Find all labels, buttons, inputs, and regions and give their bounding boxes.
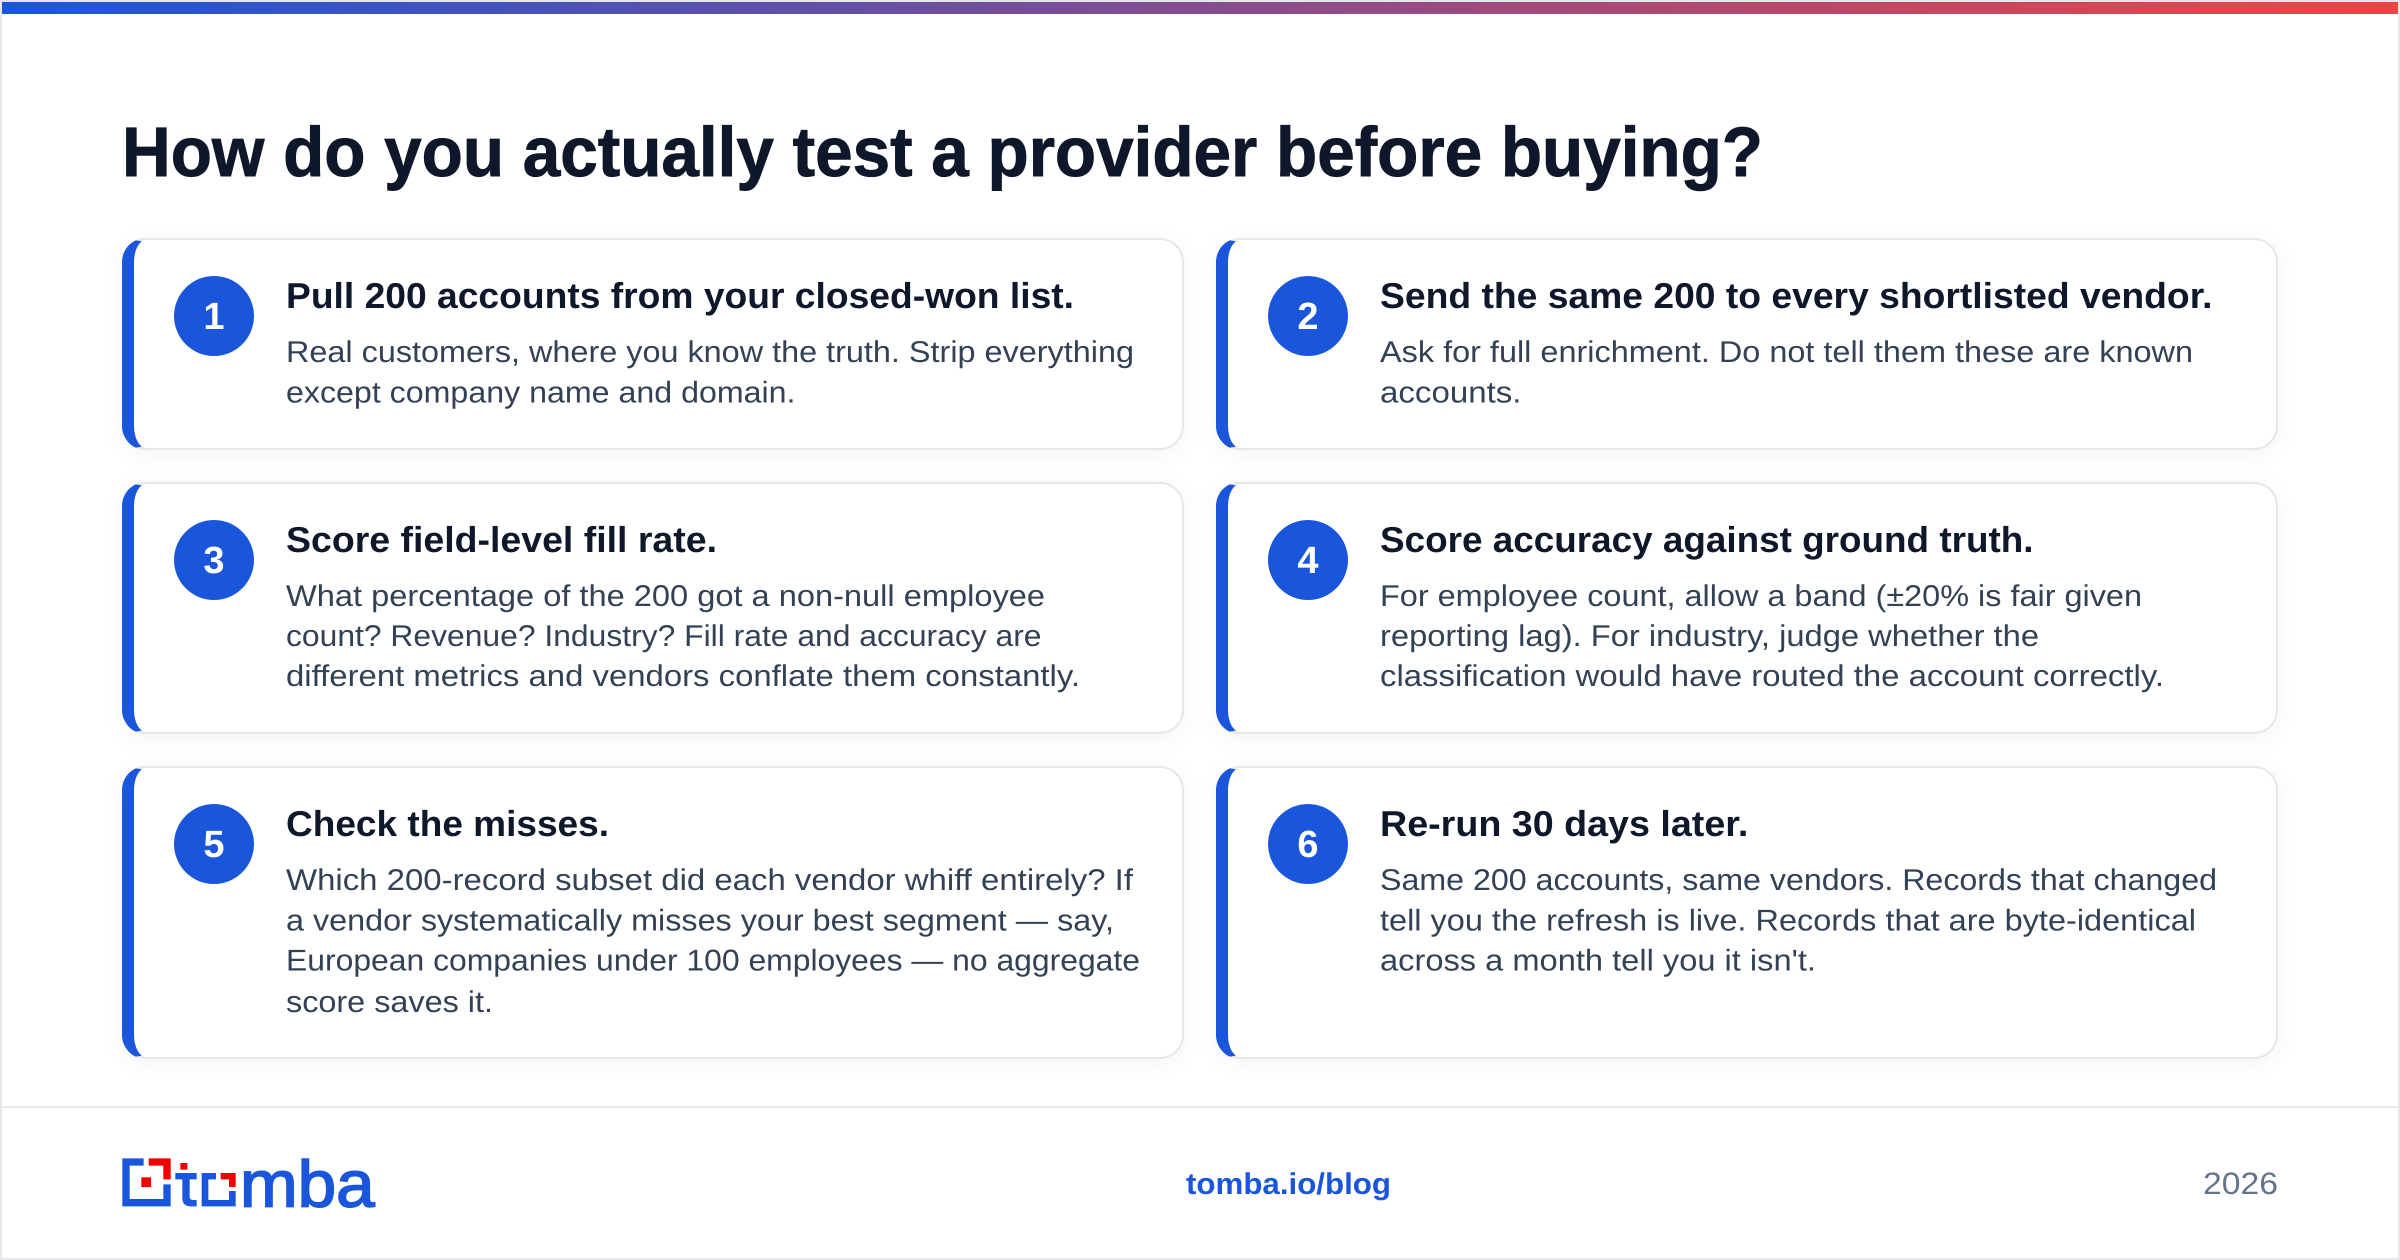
- heading: step 3: Score field-level fill rate.: [286, 519, 717, 560]
- body text: step 3: different metrics and vendors conflate them constantly.: [286, 660, 1080, 693]
- body text: step 4: reporting lag). For industry, judge whether the: [1380, 620, 2039, 653]
- panel: step 4: [1216, 482, 2278, 734]
- number badge 4: 4: [1297, 540, 1319, 582]
- body text: step 3: count? Revenue? Industry? Fill rate and accuracy are: [286, 620, 1042, 653]
- body text: step 6: [1380, 864, 2217, 978]
- logo: tomba: [122, 1147, 376, 1220]
- number badge 2: [1268, 276, 1348, 356]
- title: How do you actually test a provider before buying?: [122, 113, 1763, 191]
- body text: step 6: across a month tell you it isn't.: [1380, 944, 1816, 978]
- panel: step 2: [1216, 238, 2278, 450]
- number badge 3: 3: [203, 540, 225, 582]
- body text: step 5: a vendor systematically misses your best segment — say,: [286, 904, 1114, 938]
- number badge 6: [1268, 804, 1348, 884]
- heading: step 1: Pull 200 accounts from your closed-won list.: [286, 275, 1074, 316]
- body text: step 2: [1380, 336, 2193, 410]
- body text: step 4: For employee count, allow a band (±20% is fair given: [1380, 580, 2142, 613]
- body text: step 1: except company name and domain.: [286, 377, 796, 410]
- heading: step 4: Score accuracy against ground truth.: [1380, 519, 2034, 560]
- heading: step 5: Check the misses.: [286, 803, 609, 844]
- heading: step 6: Re-run 30 days later.: [1380, 803, 1748, 844]
- body text: step 5: European companies under 100 employees — no aggregate: [286, 944, 1140, 978]
- body text: step 5: score saves it.: [286, 986, 493, 1019]
- number badge 5: 5: [203, 824, 225, 866]
- panel: step 6: [1216, 766, 2278, 1059]
- body text: step 5: [286, 864, 1140, 1019]
- logo: tomba: mba: [240, 1147, 375, 1220]
- body text: step 6: tell you the refresh is live. Records that are byte-identical: [1380, 904, 2196, 938]
- body text: step 4: [1380, 580, 2164, 693]
- heading: step 2: Send the same 200 to every shortlisted vendor.: [1380, 275, 2213, 316]
- top gradient bar: [2, 2, 2398, 14]
- body text: step 2: accounts.: [1380, 377, 1522, 410]
- body text: step 1: [286, 336, 1134, 410]
- panel: step 3: [122, 482, 1184, 734]
- number badge 1: [174, 276, 254, 356]
- panel: step 1: [122, 238, 1184, 450]
- number badge 2: 2: [1297, 296, 1319, 338]
- footer link: tomba.io/blog: [1186, 1168, 1391, 1201]
- number badge 1: 1: [203, 296, 225, 338]
- panel: step 5: [122, 766, 1184, 1059]
- number badge 4: [1268, 520, 1348, 600]
- body text: step 2: Ask for full enrichment. Do not tell them these are known: [1380, 336, 2193, 369]
- body text: step 4: classification would have routed the account correctly.: [1380, 660, 2164, 693]
- number badge 3: [174, 520, 254, 600]
- body text: step 3: [286, 580, 1080, 693]
- number badge 5: [174, 804, 254, 884]
- body text: step 6: Same 200 accounts, same vendors. Records that changed: [1380, 864, 2217, 897]
- body text: step 1: Real customers, where you know the truth. Strip everything: [286, 336, 1134, 369]
- body text: step 5: Which 200-record subset did each vendor whiff entirely? If: [286, 864, 1134, 897]
- footer year: 2026: [2203, 1166, 2278, 1201]
- number badge 6: 6: [1297, 824, 1319, 866]
- footer: [2, 1106, 2398, 1258]
- body text: step 3: What percentage of the 200 got a non-null employee: [286, 580, 1045, 613]
